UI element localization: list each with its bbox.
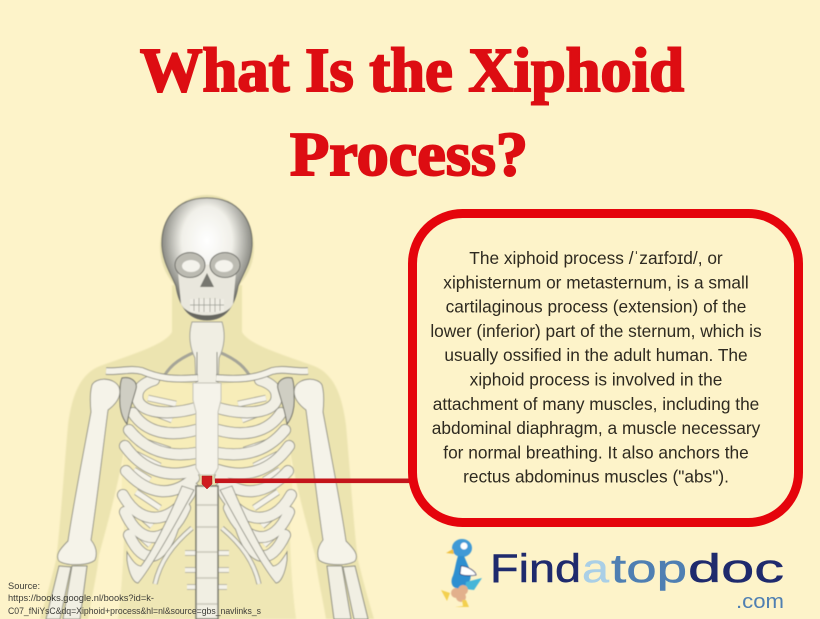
- callout text: xiphisternum or metasternum, is a small: [443, 272, 749, 292]
- logo wordmark: a: [582, 547, 610, 591]
- source note: Source:: [8, 581, 40, 591]
- logo wordmark: top: [611, 547, 687, 591]
- logo wordmark: Find: [490, 547, 581, 591]
- logo wordmark: [490, 547, 784, 613]
- callout text: [430, 248, 762, 487]
- body silhouette: [40, 195, 374, 619]
- logo: Findatopdoc.com: [441, 539, 784, 613]
- callout box: [412, 214, 798, 522]
- lower spine: [185, 486, 229, 619]
- logo wordmark: .com: [736, 591, 784, 613]
- callout text: cartilaginous process (extension) of the: [446, 297, 746, 317]
- figure: human skeleton with body outline: [40, 195, 374, 619]
- callout text: lower (inferior) part of the sternum, which is: [430, 321, 762, 341]
- logo wordmark: doc: [688, 547, 784, 591]
- callout text: abdominal diaphragm, a muscle necessary: [432, 418, 761, 438]
- callout text: attachment of many muscles, including the: [433, 394, 759, 414]
- title: What Is the Xiphoid: [140, 37, 684, 105]
- sternum: [193, 383, 221, 475]
- title: Process?: [290, 121, 528, 189]
- callout text: for normal breathing. It also anchors the: [443, 442, 749, 462]
- icon: duck mascot: [441, 539, 482, 607]
- xiphoid process marker: [202, 476, 212, 489]
- callout text: The xiphoid process /ˈzaɪfɔɪd/, or: [469, 248, 723, 268]
- connector line from xiphoid to callout: [215, 478, 411, 483]
- title: [140, 37, 684, 189]
- skull: [162, 198, 252, 320]
- callout text: usually ossified in the adult human. The: [444, 345, 748, 365]
- source note: https://books.google.nl/books?id=k-: [8, 593, 154, 603]
- callout text: rectus abdominus muscles ("abs").: [463, 467, 729, 487]
- neck vertebrae: [162, 322, 252, 385]
- rib cage, shoulders and arms: [46, 370, 368, 619]
- callout text: xiphoid process is involved in the: [470, 370, 722, 390]
- source note: C07_fNiYsC&dq=Xiphoid+process&hl=nl&source=gbs_navlinks_s: [8, 606, 261, 616]
- source note: [8, 581, 261, 616]
